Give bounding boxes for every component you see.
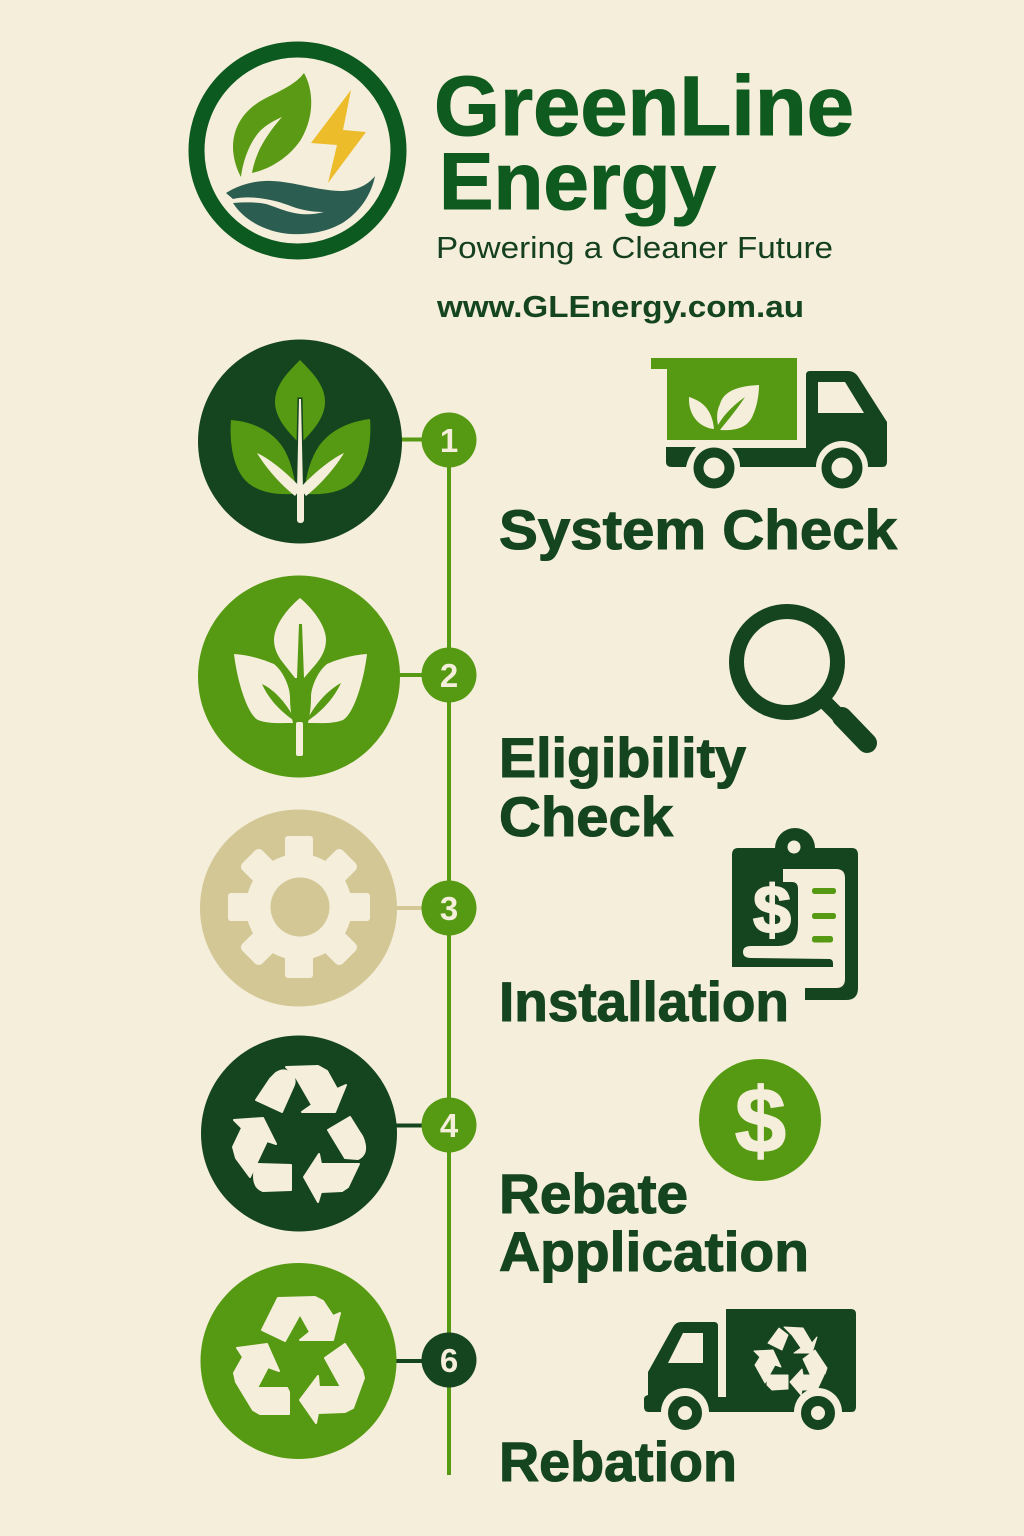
title: Energy — [439, 137, 716, 227]
icon: recycle on green circle — [200, 1263, 396, 1459]
connector 1 — [400, 438, 426, 442]
heading: Eligibility Check: Eligibility — [499, 726, 746, 789]
connector 4 — [396, 1124, 426, 1128]
number 2 badge — [422, 648, 476, 702]
number 6 badge: 6 — [440, 1342, 458, 1379]
website: www.GLEnergy.com.au — [436, 289, 804, 324]
icon: plant on dark circle — [198, 340, 402, 544]
heading: Rebate Application — [499, 1162, 809, 1283]
logo — [196, 50, 398, 252]
step 3 — [200, 810, 476, 1006]
number 2 badge: 2 — [440, 657, 458, 694]
icon: clipboard with dollar — [732, 828, 858, 1000]
connector 3 — [396, 906, 426, 910]
number 4 badge: 4 — [440, 1107, 459, 1144]
icon: dollar coin: $ — [735, 1070, 786, 1172]
heading: Eligibility Check: Check — [499, 785, 674, 848]
number 3 badge — [422, 880, 476, 936]
icon: recycle on dark circle — [201, 1036, 397, 1232]
heading: Installation: Installation — [499, 970, 789, 1033]
icon: magnifying glass — [736, 612, 867, 743]
tagline: Powering a Cleaner Future — [436, 230, 833, 265]
icon: gear on tan circle — [200, 810, 397, 1006]
step 2 — [198, 576, 476, 778]
connector 2 — [398, 673, 426, 677]
icon: clipboard with dollar: $ — [753, 872, 791, 948]
number 1 badge — [422, 412, 476, 468]
icon: dollar coin — [699, 1059, 821, 1181]
icon: plant on green circle — [198, 576, 400, 778]
timeline line — [447, 440, 451, 1475]
number 1 badge: 1 — [440, 422, 458, 459]
number 6 badge — [422, 1332, 476, 1388]
icon: recycling truck — [644, 1309, 856, 1425]
step 5 — [200, 1263, 476, 1459]
connector 5 — [396, 1359, 426, 1363]
heading: Rebation: Rebation — [499, 1430, 737, 1493]
title — [434, 59, 854, 227]
title: GreenLine — [434, 59, 854, 153]
number 3 badge: 3 — [440, 890, 458, 927]
step 1 — [198, 340, 476, 544]
step 4 — [201, 1036, 476, 1232]
number 4 badge — [422, 1098, 476, 1152]
icon: delivery truck with leaf — [651, 358, 887, 484]
heading: Eligibility Check — [499, 726, 746, 848]
heading: Rebate Application: Application — [499, 1220, 809, 1283]
heading: Rebate Application: Rebate — [499, 1162, 688, 1225]
heading: System Check: System Check — [499, 498, 898, 561]
